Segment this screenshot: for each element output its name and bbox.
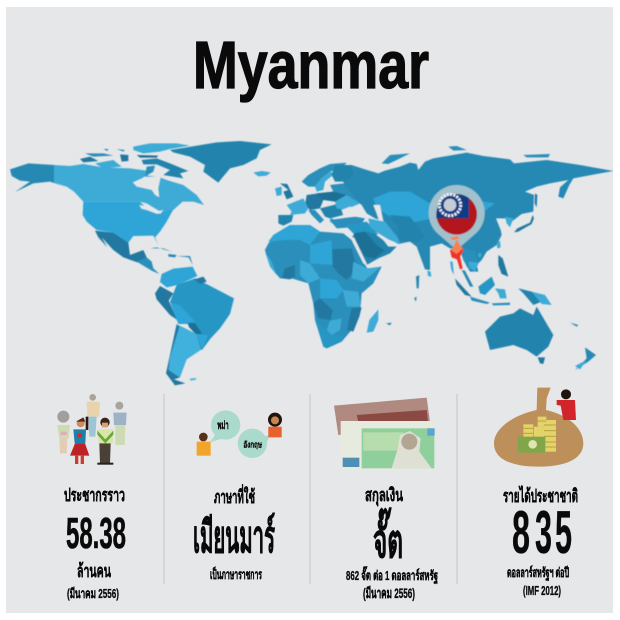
text: currency name: จั๊ต [373, 507, 403, 567]
map: Southeast Asia [463, 248, 478, 272]
map: Europe [275, 163, 383, 228]
map pin: Myanmar location marker [429, 185, 485, 269]
map: Indian Ocean islands [386, 275, 578, 327]
text: income number [512, 499, 572, 566]
panel: currency [334, 398, 438, 601]
text: population date: (มีนาคม 2556) [67, 586, 119, 601]
pin body [429, 185, 485, 250]
text: income number: 8 [512, 499, 530, 566]
map: South America [160, 267, 197, 287]
flag of Myanmar [436, 194, 477, 235]
map: Arctic Canada and Greenland [80, 141, 272, 183]
text: population number: 58.38 [66, 509, 126, 558]
panel: national income [494, 388, 583, 598]
title: Myanmar [193, 28, 429, 103]
panel: population [57, 394, 127, 601]
panel: language [193, 410, 282, 582]
text: population label: ประชากรราว [64, 485, 125, 505]
divider lines [164, 394, 457, 584]
text: income number: 5 [555, 499, 572, 566]
world map [10, 141, 613, 385]
map: Japan and Korea [514, 193, 537, 232]
icon: two people talking: พม่า [217, 419, 229, 432]
map: Middle East [352, 230, 397, 265]
speech bubbles [210, 410, 270, 458]
icon: two people talking [197, 410, 282, 458]
Myanmar highlighted [450, 247, 464, 269]
panel: language: เมียนมาร์ [193, 512, 275, 562]
icon: group of people [57, 394, 127, 465]
map: Eastern hemisphere [265, 146, 613, 370]
map: New Zealand [575, 347, 596, 370]
text: income unit: ดอลลาร์สหรัฐฯ ต่อปี [507, 565, 569, 582]
text: exchange rate: 862 จั๊ต ต่อ 1 ดอลลาร์สหรัฐ [346, 566, 438, 585]
map: Arctic Russian islands [382, 146, 550, 164]
text: official language note: เป็นภาษาราชการ [210, 565, 262, 582]
icon: banknotes [334, 398, 435, 470]
map: Americas [10, 163, 234, 385]
text: population unit: ล้านคน [77, 561, 111, 581]
icon: two people talking: อังกฤษ [243, 439, 262, 449]
text: language label: ภาษาที่ใช้ [214, 484, 255, 507]
map: Russia and Asia [343, 153, 613, 272]
map: Australia [485, 307, 553, 357]
text: income source: (IMF 2012) [523, 583, 561, 598]
text: exchange date: (มีนาคม 2556) [363, 585, 415, 601]
icon: money bag with person [494, 388, 583, 467]
map: Africa [265, 225, 382, 348]
text: currency label: สกุลเงิน [365, 485, 403, 507]
text: income number: 3 [535, 499, 552, 566]
